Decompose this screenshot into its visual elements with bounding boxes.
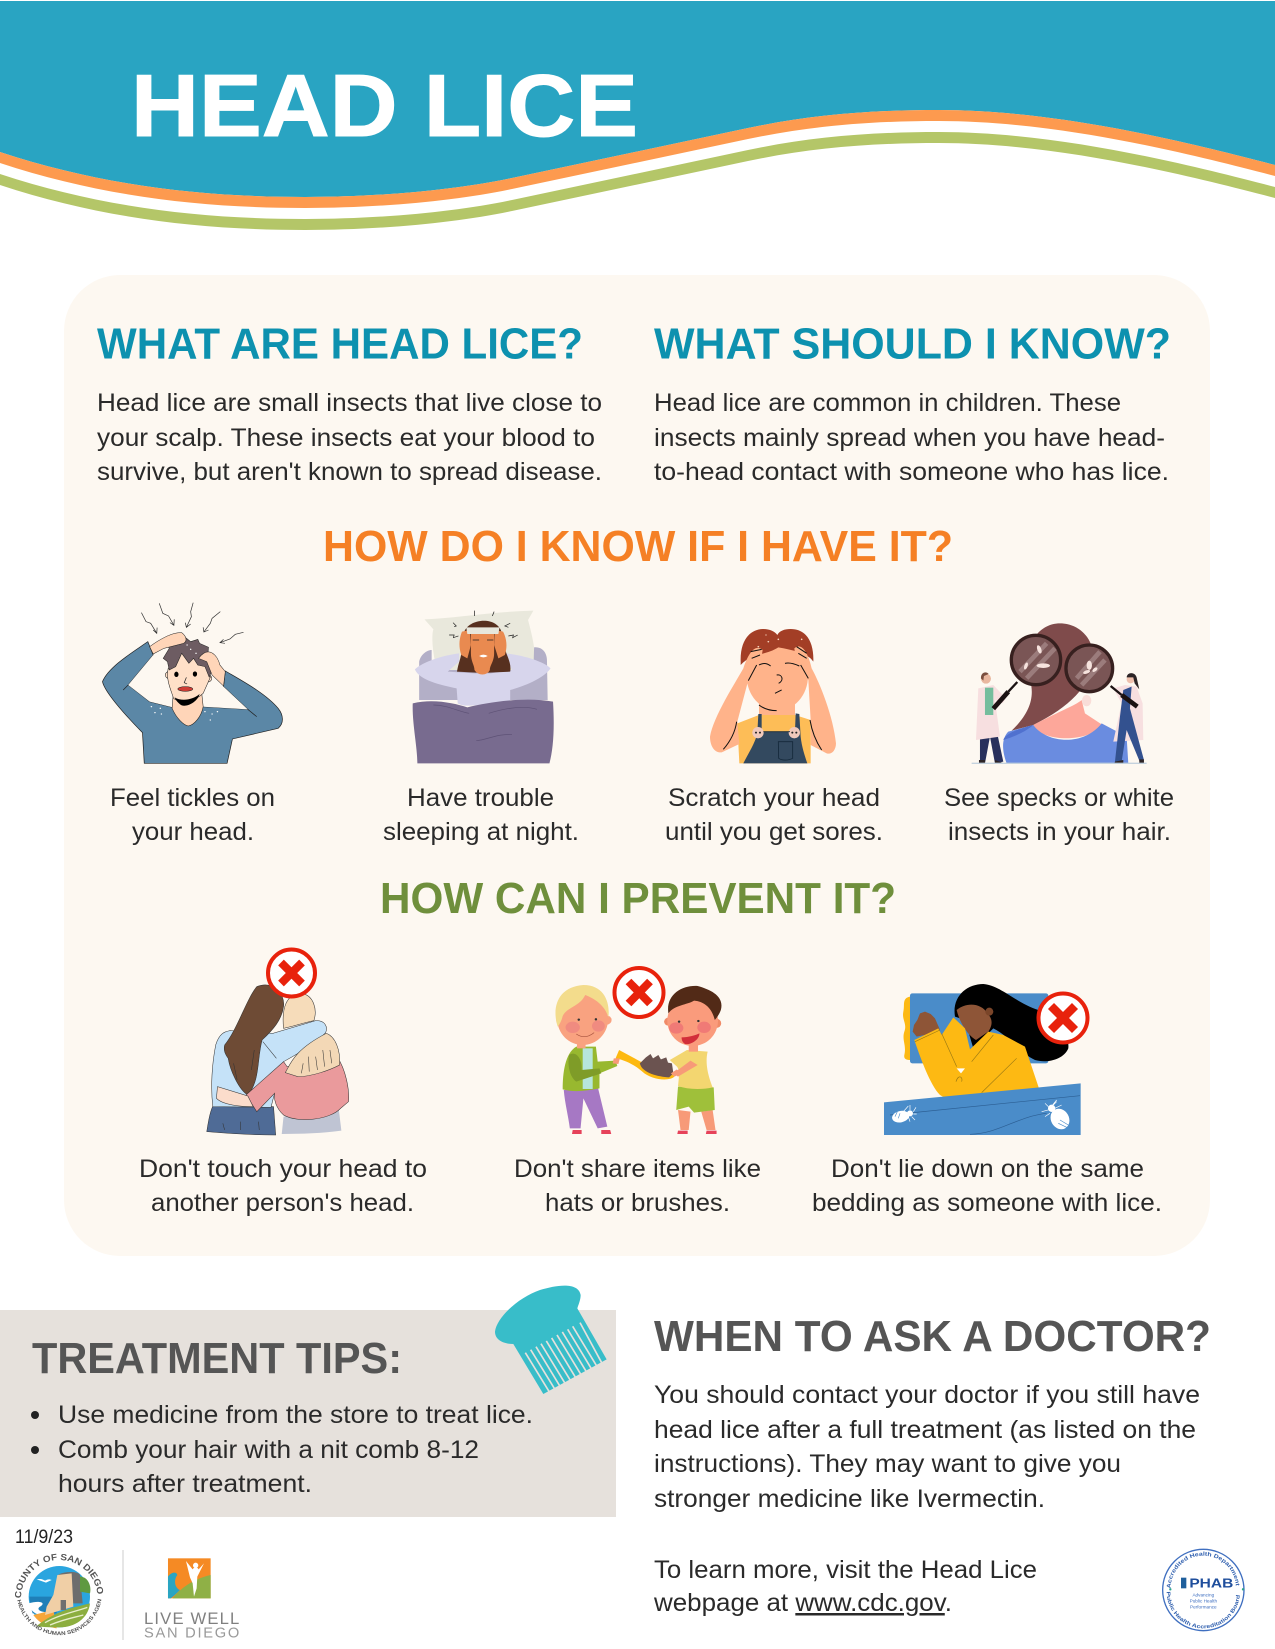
icon: man scratching head [102, 603, 282, 763]
heading: treatment tips: TREATMENT TIPS: [32, 1334, 402, 1383]
list: treatment tips: Use medicine from the store to treat lice. [58, 1401, 533, 1429]
curved text: accredited: Accredited Health Department [1166, 1552, 1240, 1588]
caption: trouble sleeping [383, 784, 579, 846]
icon: red x on children [614, 968, 664, 1017]
caption: don't lie down: Don't lie down on the same [831, 1155, 1144, 1183]
caption: don't touch [139, 1155, 427, 1217]
caption: don't share: hats or brushes. [545, 1189, 730, 1217]
text block: what are head lice: Head lice are small insects that live close to [97, 389, 602, 417]
caption: don't lie down [812, 1155, 1162, 1217]
icon: woman sleeping on bedding [884, 984, 1081, 1135]
text block: learn more: To learn more, visit the Head Lice [654, 1556, 1037, 1584]
icon: doctors examining hair with magnifiers [972, 623, 1147, 764]
icon: two people hugging [207, 985, 349, 1135]
text block: what should I know [654, 389, 1169, 486]
logo: phab seal: Public Health [1190, 1599, 1217, 1604]
text block: when to ask a doctor: instructions). They may want to give you [654, 1450, 1121, 1478]
logo: live well san diego: SAN DIEGO [144, 1626, 239, 1642]
list: treatment tips [31, 1401, 533, 1498]
caption: trouble sleeping: sleeping at night. [383, 818, 579, 846]
list: treatment tips: hours after treatment. [58, 1470, 312, 1498]
date: 11/9/23 [15, 1527, 73, 1548]
caption: feel tickles: your head. [132, 818, 254, 846]
logo: phab seal: Advancing [1192, 1593, 1215, 1598]
caption: scratch head: until you get sores. [665, 818, 883, 846]
list: treatment tips: Comb your hair with a nit comb 8-12 [58, 1436, 479, 1464]
logo: county of san diego [15, 1554, 104, 1636]
text block: when to ask a doctor [654, 1381, 1200, 1513]
caption: see specks [944, 784, 1174, 846]
text block: what should I know: insects mainly spread when you have head- [654, 424, 1165, 452]
text block: what should I know: to-head contact with someone who has lice. [654, 458, 1169, 486]
icon: children sharing a brush [555, 985, 721, 1134]
curved text: board: Public Health Accreditation Board [1166, 1592, 1240, 1628]
heading: what are head lice: WHAT ARE HEAD LICE? [97, 320, 583, 368]
caption: scratch head: Scratch your head [668, 784, 880, 812]
caption: feel tickles [110, 784, 275, 846]
curved text: agency name: HEALTH AND HUMAN SERVICES AGENCY [17, 1598, 102, 1636]
caption: don't touch: Don't touch your head to [139, 1155, 427, 1183]
text block: what are head lice [97, 389, 602, 486]
caption: don't lie down: bedding as someone with lice. [812, 1189, 1162, 1217]
text block: when to ask a doctor: head lice after a full treatment (as listed on the [654, 1416, 1196, 1444]
text block: learn more [653, 1556, 1037, 1617]
heading: when to ask a doctor: WHEN TO ASK A DOCTOR? [654, 1312, 1211, 1361]
logo: phab seal: PHAB [1189, 1576, 1233, 1590]
heading: what should I know: WHAT SHOULD I KNOW? [654, 320, 1171, 368]
panel: main cream card [64, 275, 1210, 1256]
text block: what are head lice: survive, but aren't known to spread disease. [97, 458, 602, 486]
caption: feel tickles: Feel tickles on [110, 784, 275, 812]
title: HEAD LICE [131, 56, 638, 155]
text block: when to ask a doctor: You should contact your doctor if you still have [654, 1381, 1200, 1409]
caption: don't touch: another person's head. [151, 1189, 414, 1217]
logo: phab seal: Performance [1190, 1605, 1217, 1610]
icon: woman awake in bed [413, 611, 554, 763]
heading: how can I prevent: HOW CAN I PREVENT IT? [380, 874, 896, 923]
icon: red x on hugging people [268, 950, 315, 996]
text block: what are head lice: your scalp. These insects eat your blood to [97, 424, 595, 452]
caption: scratch head [665, 784, 883, 846]
logo: phab seal [1162, 1548, 1245, 1632]
heading: how do I know: HOW DO I KNOW IF I HAVE IT? [323, 522, 953, 571]
icon: nit comb [495, 1286, 607, 1394]
icon: red x on bedding [1038, 994, 1088, 1042]
curved text: county name: COUNTY OF SAN DIEGO [15, 1554, 104, 1598]
caption: don't share: Don't share items like [514, 1155, 761, 1183]
caption: trouble sleeping: Have trouble [407, 784, 554, 812]
caption: see specks: See specks or white [944, 784, 1174, 812]
text block: learn more: webpage at www.cdc.gov. [653, 1589, 952, 1617]
header banner [0, 1, 1275, 230]
caption: see specks: insects in your hair. [948, 818, 1171, 846]
caption: don't share [514, 1155, 761, 1217]
text block: when to ask a doctor: stronger medicine like Ivermectin. [654, 1485, 1045, 1513]
logo: live well san diego: LIVE WELL [144, 1609, 239, 1628]
logo: live well san diego [144, 1558, 239, 1642]
panel: treatment tips [0, 1286, 616, 1517]
text block: what should I know: Head lice are common in children. These [654, 389, 1121, 417]
divider between logos [122, 1550, 124, 1640]
icon: child scratching head [710, 629, 836, 763]
